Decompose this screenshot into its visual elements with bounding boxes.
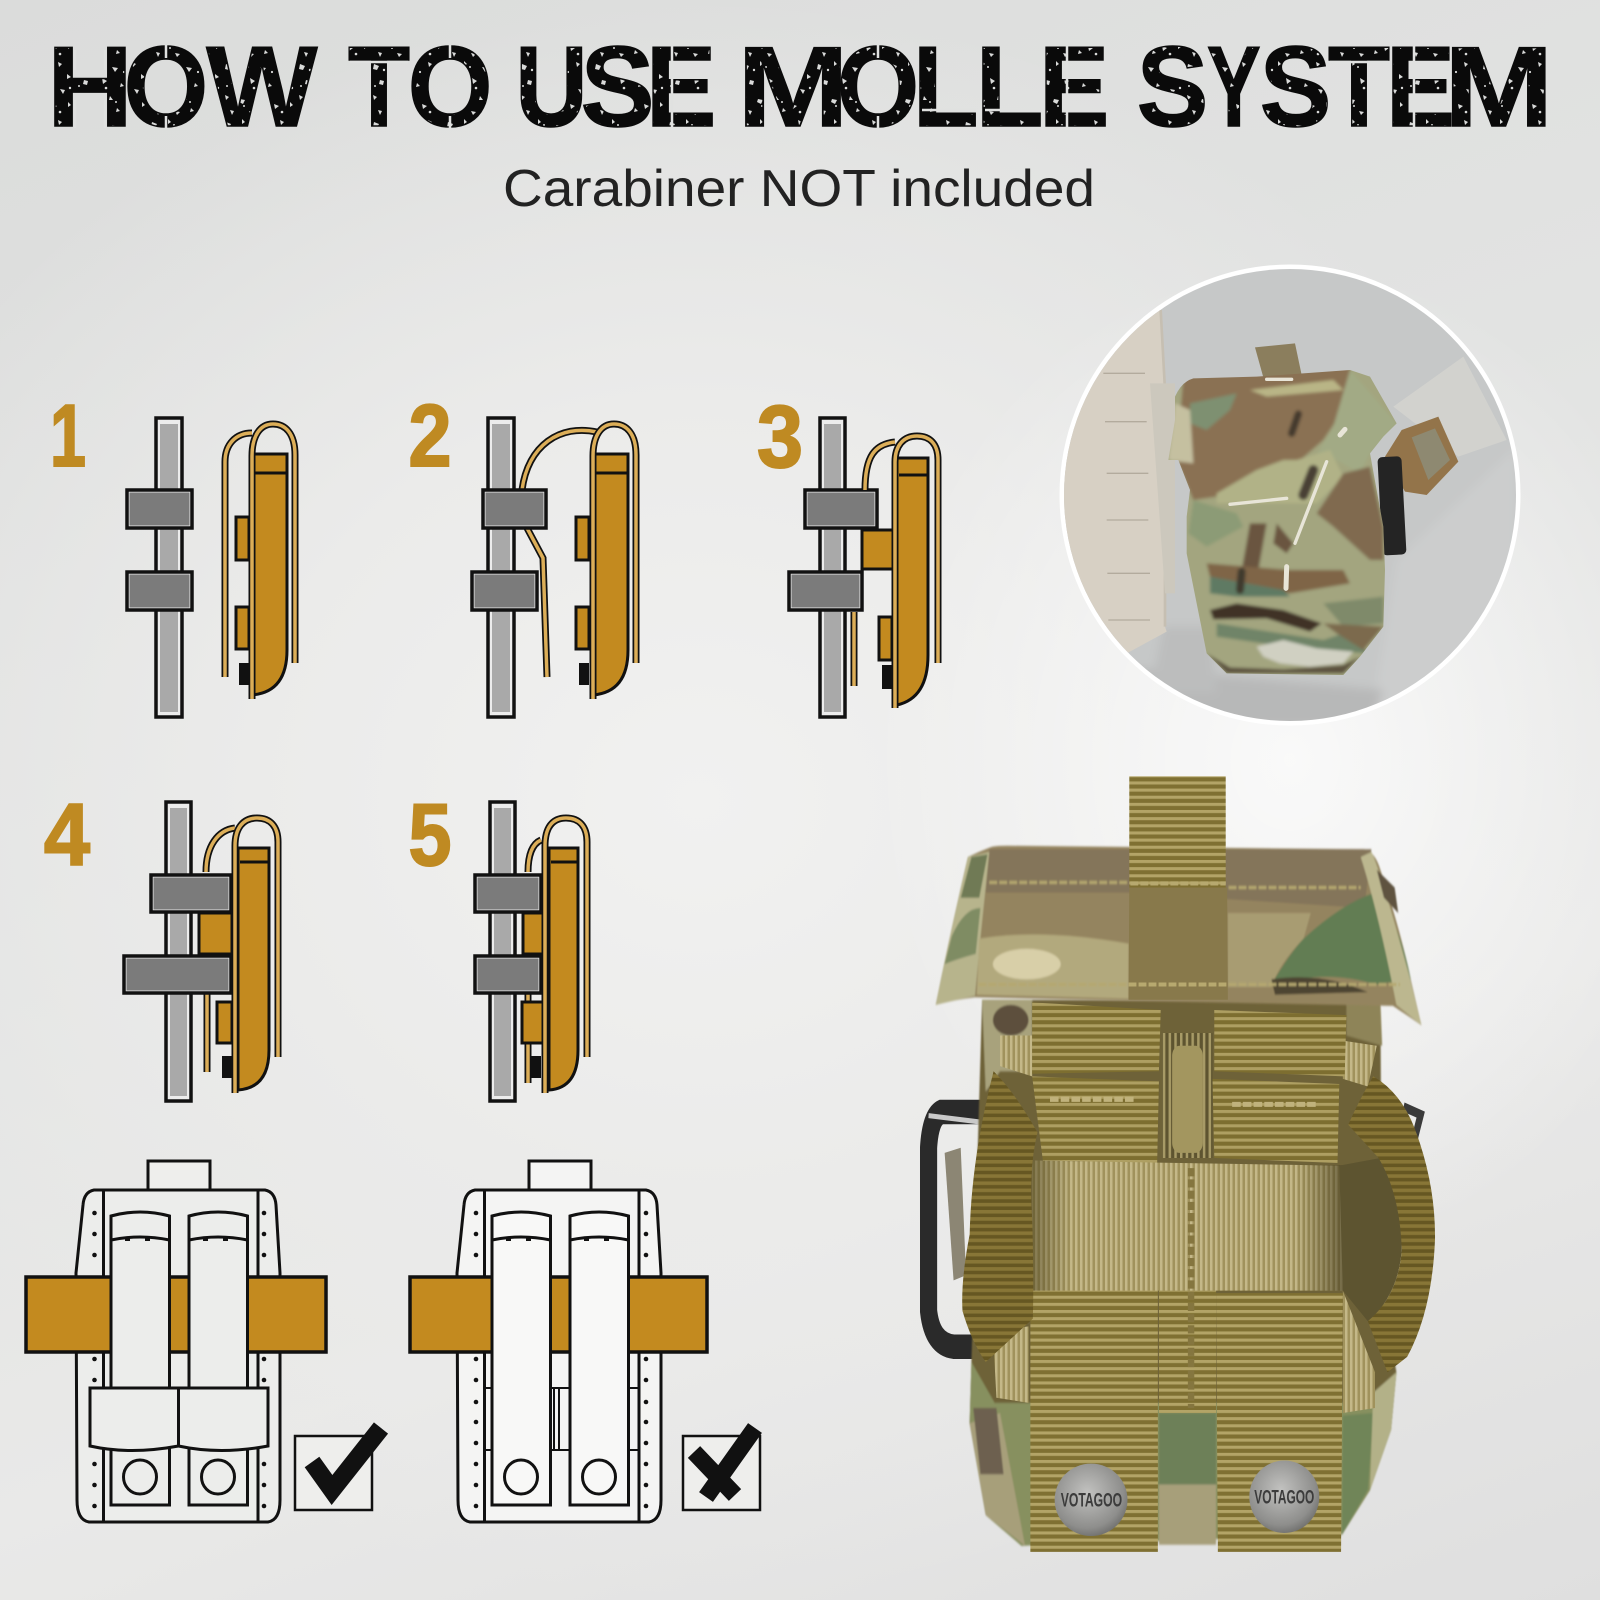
step 1 diagram: [50, 386, 295, 717]
VOTAGOO snap left: [1055, 1464, 1127, 1536]
gold strap: [26, 1277, 326, 1352]
horizontal webbing straps: [472, 490, 546, 610]
title: M: [737, 24, 849, 151]
title: E: [646, 24, 716, 151]
pouch back outline: [457, 1190, 661, 1522]
VOTAGOO snap right: [1249, 1461, 1319, 1533]
top tab: [148, 1161, 210, 1190]
title: T: [1328, 24, 1390, 151]
black carabiner: [1377, 456, 1407, 556]
title: L: [976, 24, 1044, 151]
carabiner: [929, 1107, 1421, 1347]
step 2 diagram: [408, 386, 636, 717]
horizontal webbing straps: [124, 875, 231, 993]
title: M: [1444, 24, 1554, 151]
title: S: [1137, 24, 1208, 151]
title: E: [1039, 24, 1109, 151]
small buckle: [1385, 417, 1458, 495]
worn pouch photo circle: [1060, 264, 1520, 722]
VOTAGOO snap right: VOTAGOO: [1254, 1486, 1314, 1508]
pouch side: [854, 436, 938, 708]
title: T: [348, 24, 410, 151]
snap circles: [504, 1460, 616, 1494]
camouflage body: [970, 1000, 1396, 1546]
beige plate carrier panel: [1064, 310, 1175, 652]
step number 2: 2: [408, 386, 452, 485]
central horizontal strap: [1032, 1158, 1402, 1408]
strap threaded through webbing: [522, 430, 597, 677]
camouflage lid: [936, 846, 1421, 1025]
title: S: [1260, 24, 1331, 151]
incorrect mounting diagram: [410, 1161, 760, 1522]
step 4 diagram: [44, 785, 278, 1101]
title: O: [408, 24, 493, 151]
cross box icon: [683, 1428, 760, 1510]
shirt folds: [1064, 269, 1516, 721]
title: E: [1386, 24, 1455, 151]
vertical webbing: [166, 802, 191, 1101]
top tab: [529, 1161, 591, 1190]
title: O: [124, 24, 208, 151]
title: Y: [1207, 24, 1261, 151]
step number 5: 5: [408, 785, 452, 884]
vertical webbing: [490, 802, 515, 1101]
vertical webbing: [820, 418, 845, 717]
side grab straps: [962, 1071, 1435, 1372]
title: L: [913, 24, 979, 151]
title: W: [206, 24, 318, 151]
title: H: [47, 24, 133, 151]
title: O: [837, 24, 919, 151]
main pouch product photo: [929, 776, 1435, 1552]
step 3 diagram: [757, 387, 938, 717]
pouch side: [576, 424, 636, 699]
subtitle: Carabiner NOT included: [503, 160, 1095, 218]
step number 3: 3: [757, 387, 803, 486]
title: [47, 24, 1554, 151]
pockets: [111, 1212, 248, 1505]
top pull tab: [1129, 776, 1228, 1000]
title: S: [581, 24, 654, 151]
lower retention flap: [90, 1388, 268, 1450]
pouch side and straps: [199, 818, 278, 1093]
check box icon: [295, 1428, 381, 1510]
step number 1: 1: [50, 386, 86, 485]
step 5 diagram: [408, 785, 587, 1101]
horizontal webbing straps: [789, 490, 877, 610]
pockets threaded over strap: [492, 1212, 628, 1505]
step number 4: 4: [44, 785, 90, 884]
gold strap: [410, 1277, 707, 1352]
upper webbing rows: [1000, 1002, 1377, 1163]
VOTAGOO snap left: VOTAGOO: [1061, 1489, 1122, 1511]
horizontal webbing straps: [475, 875, 541, 993]
horizontal webbing straps: [127, 490, 192, 610]
pouch side with straps: [225, 424, 295, 699]
vertical webbing: [156, 418, 182, 717]
pouch side and straps: [522, 818, 587, 1093]
pouch top tab: [1255, 343, 1302, 377]
title: U: [515, 24, 588, 151]
lower webbing straps: [993, 1288, 1375, 1552]
vertical webbing: [488, 418, 514, 717]
pouch back outline: [76, 1190, 280, 1522]
correct mounting diagram: [26, 1161, 381, 1522]
snap circles: [124, 1460, 234, 1494]
chest strap behind buckle: [1393, 357, 1507, 457]
camouflage pouch: [1163, 367, 1403, 680]
